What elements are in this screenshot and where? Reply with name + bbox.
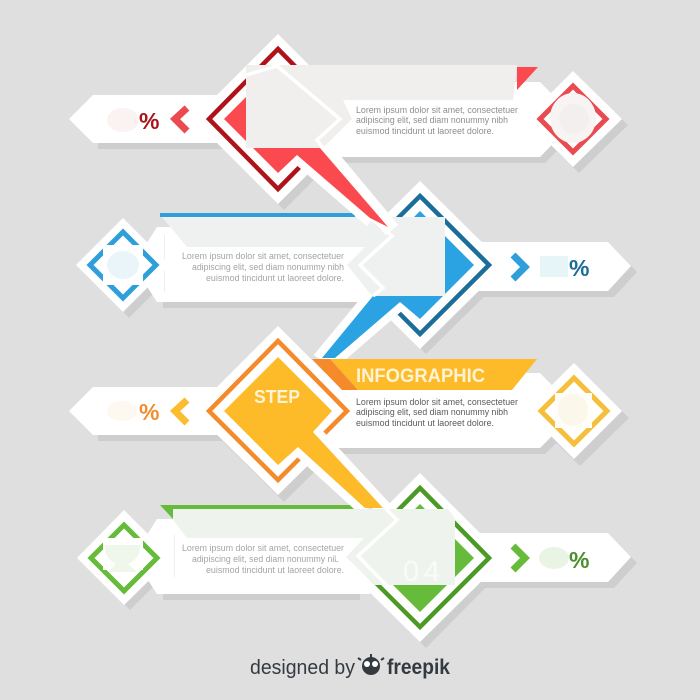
percent row 1: % [139, 108, 159, 134]
banner: infographic [312, 359, 537, 390]
percent arrow row 2: % [569, 255, 589, 281]
description text row 1: euismod tincidunt ut laoreet dolore. [356, 126, 494, 136]
description text row 1: adipiscing elit, sed diam nonummy nibh [356, 115, 508, 125]
main diamond row 3 [193, 326, 385, 510]
banner title: INFOGRAPHIC [356, 366, 485, 387]
description text row 4: adipiscing elit, sed diam nonummy nibh [192, 554, 344, 564]
icon: freepik mascot [358, 654, 384, 675]
small diamond row 1 [525, 71, 622, 167]
row 2: blue step [76, 181, 637, 360]
percent row 3 [107, 399, 187, 425]
pale panel row 1 [246, 65, 517, 148]
small diamond row 2 [76, 218, 170, 312]
white outline row 2 [360, 219, 392, 296]
white arrow left row 1 [69, 95, 230, 143]
row 4: green step [77, 473, 637, 648]
row 3: orange step [69, 326, 629, 510]
main diamond row 4 [335, 473, 505, 642]
description text row 3: Lorem ipsum dolor sit amet, consectetuer [356, 397, 518, 407]
credit: designed by freepik: designed by [250, 657, 355, 679]
percent row 1 [107, 108, 187, 134]
main diamond row 2 [320, 181, 505, 360]
row 1: red step [69, 34, 628, 230]
small diamond: trophy [77, 510, 172, 605]
description text row 2: Lorem ipsum dolor sit amet, consectetuer [182, 251, 344, 261]
description text row 4: euismod tincidunt ut laoreet dolore. [206, 565, 344, 575]
description text row 1: Lorem ipsum dolor sit amet, consectetuer [356, 105, 518, 115]
white band left row 2 [133, 227, 370, 302]
blue strip [160, 213, 355, 217]
main diamond row 1 [193, 34, 392, 230]
pale panel row 4 [173, 509, 455, 588]
red fill and tail [224, 65, 388, 227]
description text row 4: Lorem ipsum dolor sit amet, consectetuer [182, 543, 344, 553]
percent row 3: % [139, 399, 159, 425]
white band right row 1 [300, 82, 577, 157]
small diamond: row 3 [526, 363, 622, 459]
pale panel row 2 [162, 217, 445, 296]
percent arrow row 2 [470, 242, 631, 291]
STEP label: STEP [254, 387, 300, 407]
white band left [133, 519, 370, 594]
credit: designed by freepik: freepik [387, 656, 450, 679]
description text row 3 [356, 397, 518, 428]
yellow fill and tail [224, 357, 383, 508]
percent arrow row 4: % [569, 547, 589, 573]
description text row 2 [182, 251, 344, 283]
red triangle corner [517, 67, 538, 90]
blue fill and tail [322, 211, 474, 358]
description text row 1 [356, 105, 518, 136]
credit: designed by freepik [250, 654, 450, 679]
description text row 3: euismod tincidunt ut laoreet dolore. [356, 418, 494, 428]
faint step number: 04 [403, 556, 440, 588]
white arrow left row 3 [69, 387, 230, 435]
green top strip [160, 505, 355, 519]
white band right row 3 [300, 373, 577, 448]
percent arrow row 4 [470, 533, 631, 582]
description text row 4 [182, 543, 344, 575]
description text row 2: euismod tincidunt ut laoreet dolore. [206, 273, 344, 283]
white outline row 1 [246, 66, 340, 148]
description text row 3: adipiscing elit, sed diam nonummy nibh [356, 407, 508, 417]
description text row 2: adipiscing elit, sed diam nonummy nibh [192, 262, 344, 272]
